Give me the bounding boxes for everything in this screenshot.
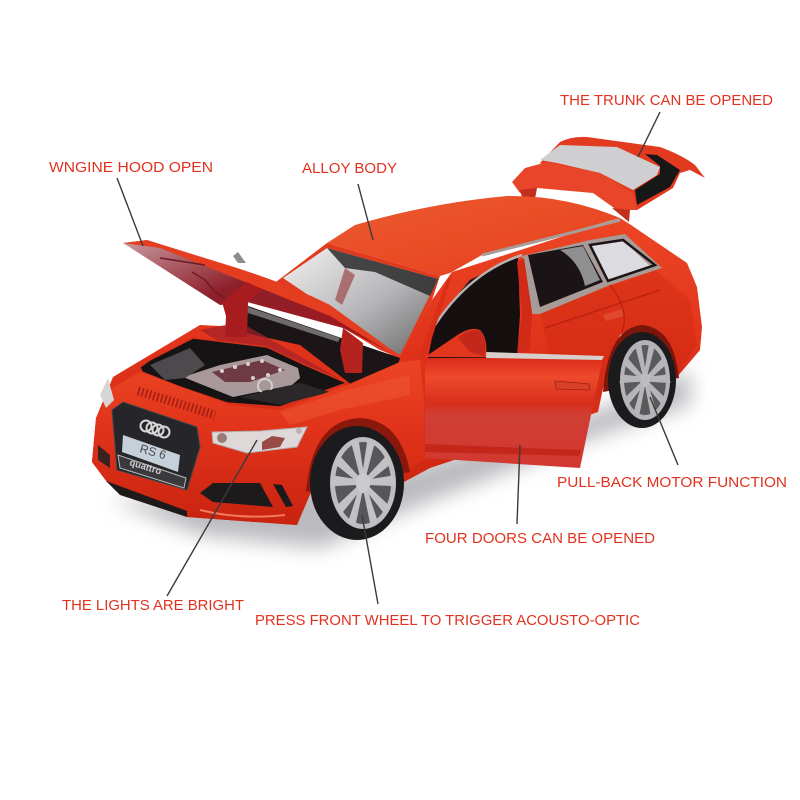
rear door window <box>528 245 603 307</box>
callout: pull-back motor: PULL-BACK MOTOR FUNCTION <box>557 474 787 491</box>
left hood strut <box>222 282 262 337</box>
lower intake <box>200 483 273 507</box>
panel: open hood <box>123 240 400 373</box>
door panel <box>425 357 603 468</box>
panel: front bumper <box>98 378 293 517</box>
rear spokes <box>619 345 671 417</box>
hood reflections <box>160 258 225 298</box>
rear door handle <box>603 309 624 321</box>
panel: opened front door <box>425 329 604 468</box>
callout: front wheel trigger <box>255 515 640 629</box>
trunk lid shell <box>540 137 705 210</box>
callout: front wheel trigger: PRESS FRONT WHEEL TO TRIGGER ACOUSTO-OPTIC <box>255 612 640 629</box>
firewall and wiper area <box>232 300 400 385</box>
callout: four doors <box>425 445 655 547</box>
panel: windshield <box>272 243 440 358</box>
panel: grille <box>112 402 200 490</box>
panel: roof <box>327 196 620 276</box>
left engine components <box>150 348 205 380</box>
door handle <box>555 381 590 390</box>
spoiler <box>512 162 637 210</box>
hood underside <box>123 240 398 356</box>
panel: rear wheel <box>608 332 676 428</box>
roof rail trim <box>482 220 620 255</box>
callout: engine hood <box>49 159 213 246</box>
right hood strut <box>340 328 363 373</box>
black cover <box>240 383 330 405</box>
callout: trunk: THE TRUNK CAN BE OPENED <box>560 92 773 109</box>
panel: engine bay <box>140 300 400 407</box>
panel: opened trunk lid <box>512 137 705 222</box>
callout: lights <box>62 440 257 614</box>
callout: lights: THE LIGHTS ARE BRIGHT <box>62 597 244 614</box>
tire <box>310 426 404 540</box>
trunk inner black panel <box>635 154 680 205</box>
rim outer <box>330 437 396 529</box>
quattro strip <box>118 455 186 488</box>
callout: alloy body <box>302 160 397 240</box>
headlight <box>212 427 307 453</box>
engine details <box>220 359 282 380</box>
fender highlight <box>280 375 410 425</box>
door opening trim <box>435 255 522 325</box>
quattro text: quattro <box>128 457 163 477</box>
callout: pull-back motor <box>557 397 787 491</box>
panel: car body side <box>92 218 702 525</box>
hood outer red edge <box>123 240 400 357</box>
trunk glass <box>540 145 660 190</box>
rear tire <box>608 332 676 428</box>
engine bay opening <box>140 338 347 407</box>
body crease <box>545 285 660 332</box>
panel: front fender <box>92 360 425 525</box>
bumper highlight <box>200 510 285 517</box>
door window trim <box>486 352 604 360</box>
left bumper fog area <box>98 445 110 468</box>
rear bay red <box>200 322 350 385</box>
interior seat <box>335 268 355 305</box>
callout: four doors: FOUR DOORS CAN BE OPENED <box>425 530 655 547</box>
spokes <box>330 440 396 528</box>
hood vents <box>138 391 215 415</box>
rear rim <box>620 340 670 420</box>
plate text: RS 6 <box>138 441 168 462</box>
window frame trim <box>522 234 662 314</box>
callout: alloy body: ALLOY BODY <box>302 160 397 177</box>
callout: trunk <box>560 92 773 157</box>
panel: front wheel <box>310 426 404 540</box>
ground shadow <box>110 370 690 548</box>
engine cover <box>183 355 300 397</box>
lower lip <box>106 481 187 517</box>
door lower band <box>425 444 581 456</box>
callout: engine hood: WNGINE HOOD OPEN <box>49 159 213 176</box>
rear wheel arch <box>603 325 679 392</box>
quarter window <box>590 240 650 279</box>
rear body shading <box>540 270 697 400</box>
b-pillar <box>517 258 532 354</box>
side vent <box>273 484 293 507</box>
Audi rings <box>140 420 170 438</box>
panel: side windows <box>428 234 662 358</box>
front door opening <box>428 256 520 358</box>
mirror <box>425 329 486 357</box>
front wheel arch <box>306 418 410 492</box>
spoiler supports <box>520 188 630 222</box>
pillar between windshield and door <box>418 276 452 360</box>
small hinge <box>233 252 246 263</box>
left headlight edge <box>100 378 114 408</box>
licence plate <box>122 435 180 472</box>
